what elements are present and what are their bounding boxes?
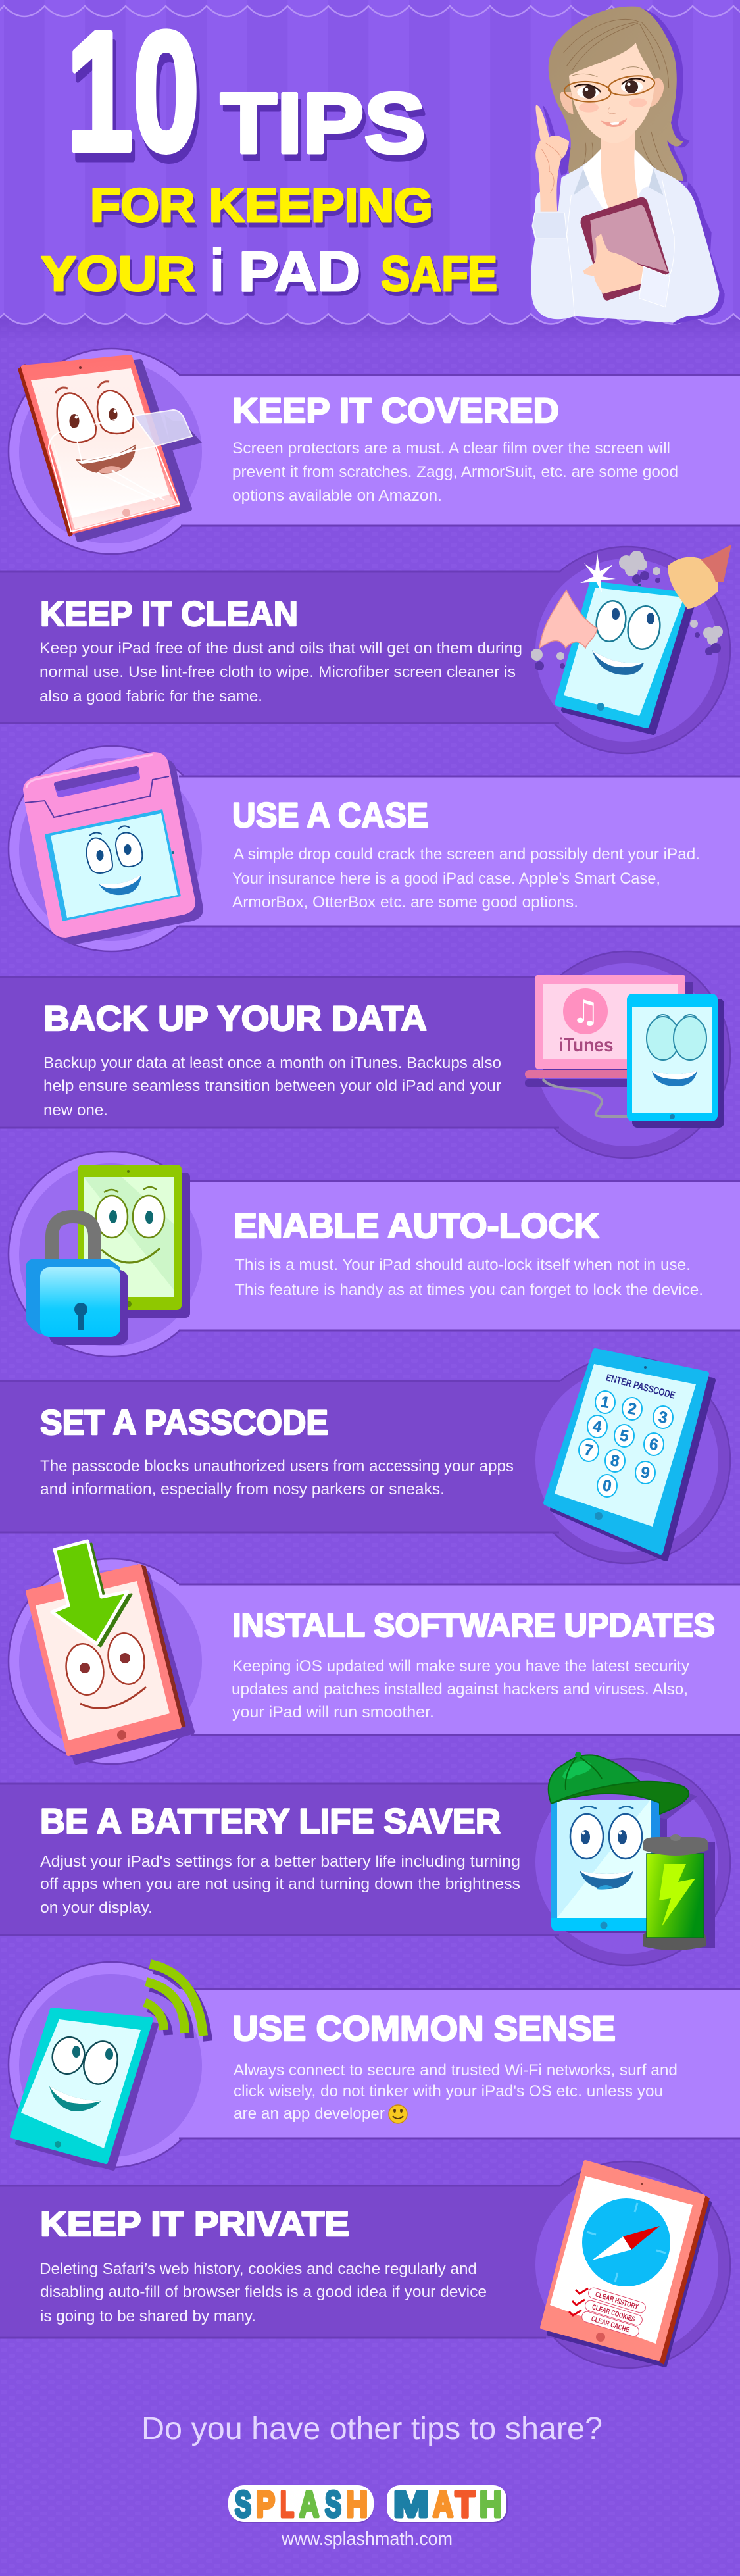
heading: SET A PASSCODE bbox=[40, 1403, 328, 1442]
badge circle and band bbox=[0, 2161, 730, 2368]
text block: normal use. Use lint-free cloth to wipe. Microfiber screen cleaner is bbox=[39, 663, 516, 681]
keypad: 3 bbox=[657, 1408, 669, 1427]
badge circle and band bbox=[9, 746, 740, 951]
panel: keep it covered bbox=[9, 349, 740, 554]
logo: splash math: M bbox=[393, 2483, 429, 2525]
logo: splash math: L bbox=[280, 2483, 294, 2525]
icon: tablet with download arrow bbox=[28, 1541, 192, 1762]
text block: on your display. bbox=[40, 1899, 153, 1917]
keypad: 6 bbox=[648, 1435, 660, 1454]
text block: off apps when you are not using it and turning down the brightness bbox=[40, 1875, 520, 1893]
eyes bbox=[577, 86, 599, 98]
logo: splash math bbox=[228, 2483, 508, 2525]
keypad: 5 bbox=[618, 1427, 630, 1446]
panel: keep it clean bbox=[0, 545, 731, 753]
icon: green tablet with padlock bbox=[26, 1165, 190, 1345]
panel: use a case bbox=[9, 746, 740, 951]
badge circle and band bbox=[9, 1962, 740, 2167]
icon: tablet in pink case bbox=[23, 752, 203, 944]
iTunes label: iTunes bbox=[559, 1034, 613, 1056]
title bbox=[41, 0, 497, 304]
text block bbox=[39, 2260, 487, 2325]
holding hand bbox=[583, 234, 645, 294]
text block: also a good fabric for the same. bbox=[39, 688, 262, 705]
text block: is going to be shared by many. bbox=[40, 2308, 256, 2325]
text block: Your insurance here is a good iPad case. Apple’s Smart Case, bbox=[232, 870, 660, 888]
text block: new one. bbox=[43, 1101, 108, 1119]
battery bbox=[671, 1842, 715, 1948]
keypad: 7 bbox=[583, 1441, 595, 1460]
heading: USE COMMON SENSE bbox=[232, 2009, 616, 2048]
logo: splash math: H bbox=[480, 2483, 502, 2525]
text block: are an app developer bbox=[234, 2105, 385, 2123]
text block: disabling auto-fill of browser fields is a good idea if your device bbox=[40, 2283, 487, 2301]
text block: Screen protectors are a must. A clear film over the screen will bbox=[232, 440, 670, 457]
logo: splash math: T bbox=[455, 2483, 475, 2525]
text block: ArmorBox, OtterBox etc. are some good options. bbox=[232, 894, 578, 911]
face bbox=[569, 43, 654, 143]
title: tips: TIPS bbox=[220, 75, 426, 171]
icon: tablet with wifi signal bbox=[12, 1964, 208, 2169]
panel: install software updates bbox=[9, 1541, 740, 1764]
glasses bbox=[564, 80, 611, 103]
text block: Keeping iOS updated will make sure you have the latest security bbox=[232, 1657, 689, 1675]
badge circle and band bbox=[9, 1559, 740, 1764]
heading: USE A CASE bbox=[232, 796, 428, 835]
text block bbox=[40, 1457, 514, 1498]
checklist: CLEAR HISTORY bbox=[594, 2290, 639, 2311]
text block: help ensure seamless transition between your old iPad and your bbox=[43, 1077, 501, 1095]
title: your ipad safe: i bbox=[210, 238, 224, 304]
text block: This feature is handy as at times you can forget to lock the device. bbox=[235, 1281, 703, 1299]
held tablet bbox=[581, 197, 669, 301]
heading: BACK UP YOUR DATA bbox=[43, 999, 427, 1038]
closing question: Do you have other tips to share? bbox=[141, 2412, 603, 2446]
header bbox=[0, 0, 740, 342]
heading: BE A BATTERY LIFE SAVER bbox=[40, 1802, 501, 1841]
logo: splash math: A bbox=[433, 2483, 453, 2525]
logo: splash math: H bbox=[346, 2483, 368, 2525]
text block: your iPad will run smoother. bbox=[232, 1704, 434, 1721]
heading: KEEP IT COVERED bbox=[232, 391, 559, 430]
title: 10: 10 bbox=[66, 0, 199, 186]
text block bbox=[235, 1256, 703, 1299]
panel: be a battery life saver bbox=[0, 1752, 730, 1965]
brows, nose, mouth bbox=[572, 67, 643, 77]
text block: The passcode blocks unauthorized users from accessing your apps bbox=[40, 1457, 514, 1475]
cuff bbox=[533, 213, 567, 238]
icon: laptop with iTunes and tablet bbox=[525, 975, 724, 1128]
text block: and information, especially from nosy parkers or sneaks. bbox=[40, 1480, 445, 1498]
badge circle and band bbox=[0, 1357, 730, 1563]
text block bbox=[234, 2061, 678, 2123]
keypad: 0 bbox=[601, 1477, 613, 1496]
text block: Backup your data at least once a month on iTunes. Backups also bbox=[43, 1054, 501, 1072]
heading: KEEP IT CLEAN bbox=[40, 595, 298, 634]
text block: Adjust your iPad's settings for a better battery life including turning bbox=[40, 1853, 520, 1871]
text block: prevent it from scratches. Zagg, ArmorSuit, etc. are some good bbox=[232, 463, 678, 481]
keypad label: ENTER PASSCODE bbox=[605, 1372, 676, 1402]
title: your ipad safe: YOUR bbox=[41, 246, 195, 301]
keypad bbox=[579, 1391, 673, 1497]
text block: Deleting Safari’s web history, cookies and cache regularly and bbox=[39, 2260, 477, 2278]
badge circle and band bbox=[0, 1759, 730, 1965]
website url: www.splashmath.com bbox=[281, 2529, 453, 2550]
icon: tablet with safari compass bbox=[542, 2162, 710, 2365]
keypad: 4 bbox=[591, 1417, 603, 1436]
right cuff bbox=[639, 266, 670, 307]
text block bbox=[232, 1657, 689, 1721]
keypad: 1 bbox=[599, 1393, 611, 1412]
title: your ipad safe: SAFE bbox=[381, 246, 497, 301]
icon: smiley bbox=[389, 2105, 407, 2123]
text block bbox=[40, 1853, 520, 1917]
keypad: 8 bbox=[609, 1452, 621, 1471]
checklist bbox=[581, 2286, 647, 2338]
panel: back up your data bbox=[0, 951, 730, 1158]
hand pointing bbox=[535, 105, 569, 212]
text block: A simple drop could crack the screen and possibly dent your iPad. bbox=[234, 846, 700, 863]
icon: tablet being cleaned bbox=[531, 545, 731, 732]
text block: Always connect to secure and trusted Wi-Fi networks, surf and bbox=[234, 2061, 678, 2079]
text block bbox=[232, 440, 678, 505]
title: for keeping: FOR KEEPING bbox=[90, 180, 433, 232]
green cap bbox=[551, 1782, 689, 1814]
icon: tablet with passcode keypad bbox=[546, 1351, 713, 1559]
heading: ENABLE AUTO-LOCK bbox=[234, 1207, 599, 1246]
logo: splash math: S bbox=[235, 2483, 251, 2525]
panel: use common sense bbox=[9, 1962, 740, 2169]
keypad: 2 bbox=[626, 1400, 638, 1419]
text block: options available on Amazon. bbox=[232, 487, 442, 505]
panel: enable auto-lock bbox=[9, 1151, 740, 1357]
icon: tablet with screen protector bbox=[20, 357, 202, 540]
checklist: CLEAR CACHE bbox=[590, 2315, 630, 2334]
logo: splash math: P bbox=[256, 2483, 275, 2525]
keypad: 9 bbox=[639, 1463, 651, 1482]
illustration: woman with tablet bbox=[531, 7, 725, 324]
shirt bbox=[531, 149, 719, 323]
badge circle and band bbox=[9, 1151, 740, 1357]
badge circle and band bbox=[0, 951, 730, 1158]
icon: tablet with cap and battery bbox=[549, 1752, 715, 1950]
panel: keep it private bbox=[0, 2161, 730, 2368]
text block: This is a must. Your iPad should auto-lock itself when not in use. bbox=[235, 1256, 691, 1274]
title: your ipad safe bbox=[41, 238, 497, 304]
panel: set a passcode bbox=[0, 1351, 730, 1563]
text block: click wisely, do not tinker with your iPad's OS etc. unless you bbox=[234, 2083, 663, 2100]
ears bbox=[560, 78, 664, 114]
logo: splash math: S bbox=[325, 2483, 341, 2525]
text block bbox=[39, 640, 522, 705]
text block: updates and patches installed against hackers and viruses. Also, bbox=[232, 1680, 688, 1698]
checklist: CLEAR COOKIES bbox=[591, 2303, 636, 2324]
text block: Keep your iPad free of the dust and oils that will get on them during bbox=[39, 640, 522, 657]
heading: INSTALL SOFTWARE UPDATES bbox=[232, 1607, 715, 1644]
badge circle and band bbox=[9, 349, 740, 554]
text block bbox=[43, 1054, 501, 1119]
logo: splash math: A bbox=[299, 2483, 319, 2525]
badge circle and band bbox=[0, 547, 730, 753]
text block bbox=[232, 846, 700, 911]
title: your ipad safe: PAD bbox=[239, 241, 360, 303]
icon: music note: ♫ bbox=[571, 994, 600, 1030]
heading: KEEP IT PRIVATE bbox=[40, 2205, 349, 2244]
neck bbox=[601, 130, 639, 209]
